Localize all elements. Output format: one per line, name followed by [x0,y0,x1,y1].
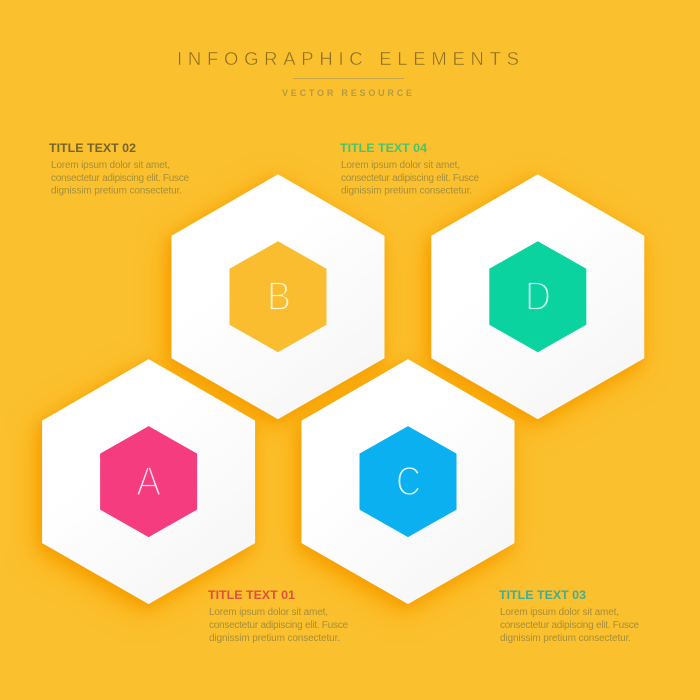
text block: title text 02: dignissim pretium consectetur. [51,186,182,196]
hexagon C [302,359,514,604]
text block: title text 02: consectetur adipiscing elit. Fusce [51,173,189,184]
hexagon D: D [525,273,551,319]
text block: title text 04: TITLE TEXT 04 [340,141,427,155]
text block: title text 03: Lorem ipsum dolor sit amet, [500,607,619,618]
text block: title text 01: consectetur adipiscing elit. Fusce [209,620,348,631]
title: INFOGRAPHIC ELEMENTS [177,48,519,69]
text block: title text 01: Lorem ipsum dolor sit amet, [209,607,328,618]
hexagon D [431,174,644,419]
text block: title text 04: consectetur adipiscing elit. Fusce [341,173,479,184]
subtitle: VECTOR RESOURCE [282,88,412,98]
text block: title text 02: TITLE TEXT 02 [49,141,136,155]
text block: title text 02 [49,141,189,196]
hexagon C: C [396,458,421,504]
text block: title text 04 [340,141,479,196]
text block: title text 04: dignissim pretium consectetur. [341,186,472,196]
hexagon B: B [267,273,291,319]
hexagon A: A [136,458,162,504]
text block: title text 03 [499,588,639,644]
hexagon shadows [36,178,642,612]
hexagon A [42,359,255,604]
hexagon B [172,174,384,419]
text block: title text 04: Lorem ipsum dolor sit amet, [341,160,460,171]
text block: title text 01: TITLE TEXT 01 [208,588,295,602]
text block: title text 03: TITLE TEXT 03 [499,588,586,602]
text block: title text 01: dignissim pretium consectetur. [209,633,340,644]
text block: title text 03: dignissim pretium consectetur. [500,633,631,644]
text block: title text 01 [208,588,348,644]
text block: title text 03: consectetur adipiscing elit. Fusce [500,620,639,631]
text block: title text 02: Lorem ipsum dolor sit amet, [51,160,170,171]
